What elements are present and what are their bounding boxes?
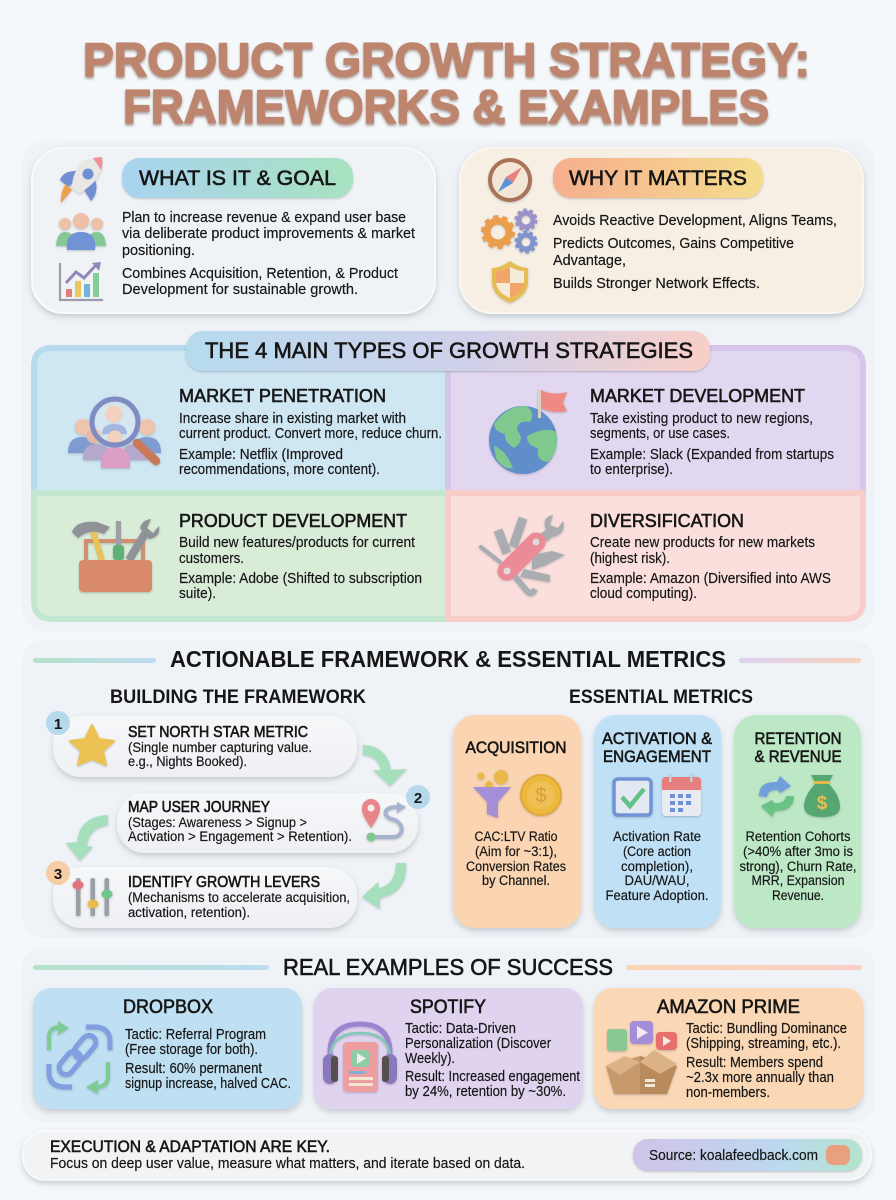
text: amazon prime: (Shipping, streaming, etc.). xyxy=(686,1036,841,1052)
icon: people xyxy=(56,213,106,250)
title: FRAMEWORKS & EXAMPLES xyxy=(123,80,769,133)
icon: funnel and coin: $ xyxy=(535,785,547,807)
text: spotify: by 24%, retention by ~30%. xyxy=(405,1084,566,1100)
section backdrop: examples xyxy=(22,947,875,1122)
text: spotify: Personalization (Discover xyxy=(405,1036,551,1052)
example card: dropbox xyxy=(33,988,302,1109)
heading: real examples: REAL EXAMPLES OF SUCCESS xyxy=(283,954,613,980)
text: product development: Build new features/products for current xyxy=(179,535,415,551)
text: market development: Take existing product to new regions, xyxy=(590,411,813,427)
icon: star xyxy=(70,725,114,765)
metric card: acquisition xyxy=(453,715,581,928)
text: dropbox: Result: 60% permanent xyxy=(125,1061,262,1077)
text: product development: Example: Adobe (Shifted to subscription xyxy=(179,571,422,587)
text: amazon prime: non-members. xyxy=(686,1085,770,1101)
text: spotify: Result: Increased engagement xyxy=(405,1069,580,1085)
text: spotify: Tactic: Data-Driven xyxy=(405,1021,516,1037)
text: what is it body: Development for sustainable growth. xyxy=(122,282,358,298)
example card: dropbox: DROPBOX xyxy=(123,997,213,1018)
text: market penetration: MARKET PENETRATION xyxy=(179,385,386,406)
text: why it matters body: Builds Stronger Network Effects. xyxy=(553,276,760,292)
icon: headphones xyxy=(323,1024,397,1092)
text: diversification: Create new products for new markets xyxy=(590,535,815,551)
text: step 1 xyxy=(128,724,312,769)
text: market development: Example: Slack (Expanded from startups xyxy=(590,447,834,463)
heading pill: what is it: WHAT IS IT & GOAL xyxy=(139,166,336,190)
title xyxy=(83,33,810,133)
heading pill: what is it xyxy=(122,158,353,198)
text: what is it body: Plan to increase revenue & expand user base xyxy=(122,210,406,226)
text: retention metrics: Revenue. xyxy=(772,888,824,903)
text: step 3: IDENTIFY GROWTH LEVERS xyxy=(128,874,320,891)
text: step 2: Activation > Engagement > Retention). xyxy=(128,829,352,844)
badge 1 xyxy=(46,711,70,735)
icon: funnel and coin xyxy=(473,770,561,818)
footer banner xyxy=(23,1131,871,1180)
metric card: acquisition: ACQUISITION xyxy=(466,738,566,757)
text: acquisition metrics: (Aim for ~3:1), xyxy=(475,844,557,859)
metric card: retention xyxy=(734,715,861,928)
text: retention metrics: strong), Churn Rate, xyxy=(740,859,856,874)
text: activation metrics: Activation Rate xyxy=(613,829,701,844)
badge 3 xyxy=(46,861,70,885)
text: product development: PRODUCT DEVELOPMENT xyxy=(179,510,407,531)
icon: compass xyxy=(490,160,530,200)
text: dropbox xyxy=(125,1027,291,1092)
text: retention metrics: Retention Cohorts xyxy=(746,829,851,844)
text: what is it body xyxy=(122,210,415,298)
subheading: essential metrics: ESSENTIAL METRICS xyxy=(569,686,753,708)
panel: what is it and goal xyxy=(32,148,435,313)
icon: sliders xyxy=(72,878,112,916)
text: why it matters body: Advantage, xyxy=(553,253,626,269)
text: activation metrics: (Core action xyxy=(623,844,691,859)
text: step 2: MAP USER JOURNEY xyxy=(128,799,270,816)
footer text: Focus on deep user value, measure what matters, and iterate based on data. xyxy=(50,1156,525,1172)
footer text xyxy=(50,1137,525,1172)
icon: box and media tiles xyxy=(606,1021,677,1094)
cell: market development xyxy=(448,348,863,493)
section backdrop: framework xyxy=(22,640,875,938)
text: what is it body: positioning. xyxy=(122,243,195,259)
icon: magnifier and people xyxy=(68,399,161,468)
text: dropbox: signup increase, halved CAC. xyxy=(125,1076,291,1092)
text: market penetration: Increase share in existing market with xyxy=(179,411,406,427)
text: market development: to enterprise). xyxy=(590,462,673,478)
text: retention metrics: MRR, Expansion xyxy=(752,873,844,888)
footer text: EXECUTION & ADAPTATION ARE KEY. xyxy=(50,1137,330,1156)
text: amazon prime xyxy=(686,1021,847,1101)
text: why it matters body: Avoids Reactive Development, Aligns Teams, xyxy=(553,213,837,229)
icon: shield xyxy=(492,261,528,303)
badge 2 xyxy=(406,785,430,809)
title: PRODUCT GROWTH STRATEGY: xyxy=(83,33,810,86)
text: step 3 xyxy=(128,874,350,920)
icon: gears xyxy=(483,210,536,252)
section backdrop: overview and types xyxy=(22,140,875,632)
text: step 3: (Mechanisms to accelerate acquisition, xyxy=(128,890,350,905)
text: diversification: (highest risk). xyxy=(590,551,670,567)
icon: multitool xyxy=(481,515,565,593)
heading pill: four main types: THE 4 MAIN TYPES OF GROWTH STRATEGIES xyxy=(205,338,693,363)
text: amazon prime: Tactic: Bundling Dominance xyxy=(686,1021,847,1037)
text: retention metrics xyxy=(740,829,856,903)
text: acquisition metrics: by Channel. xyxy=(482,873,550,888)
text: diversification xyxy=(590,510,831,602)
heading: real examples xyxy=(33,954,862,980)
heading: framework and metrics: ACTIONABLE FRAMEWORK & ESSENTIAL METRICS xyxy=(170,646,726,672)
text: step 2 xyxy=(128,799,352,844)
step 2: user journey xyxy=(117,785,430,853)
text: spotify: Weekly). xyxy=(405,1051,455,1067)
step 1: north star metric xyxy=(46,711,357,777)
icon: globe with flag xyxy=(489,390,567,474)
text: why it matters body xyxy=(553,213,837,292)
icon: toolbox xyxy=(72,519,159,592)
text: product development: customers. xyxy=(179,551,244,567)
example card: amazon prime: AMAZON PRIME xyxy=(657,997,800,1018)
text: product development: suite). xyxy=(179,586,216,602)
text: market penetration: Example: Netflix (Improved xyxy=(179,447,343,463)
heading pill: why it matters xyxy=(553,158,763,198)
example card: spotify: SPOTIFY xyxy=(410,997,486,1018)
heading pill: why it matters: WHY IT MATTERS xyxy=(569,166,747,190)
text: amazon prime: ~2.3x more annually than xyxy=(686,1070,834,1086)
icon: checkbox and calendar xyxy=(614,774,701,816)
text: market development xyxy=(590,385,834,478)
panel: four growth strategies xyxy=(34,331,863,619)
heading pill: four main types xyxy=(186,331,710,371)
metric card: activation: ENGAGEMENT xyxy=(603,747,711,766)
icon: chain and arrows xyxy=(49,1021,110,1094)
text: acquisition metrics xyxy=(466,829,566,888)
badge 1: 1 xyxy=(54,716,62,733)
text: market penetration: recommendations, more content). xyxy=(179,462,380,478)
text: dropbox: Tactic: Referral Program xyxy=(125,1027,266,1043)
text: market development: segments, or use cases. xyxy=(590,426,730,442)
badge 2: 2 xyxy=(414,790,422,807)
cell: market penetration xyxy=(34,348,448,493)
cell: diversification xyxy=(448,493,863,619)
cell: product development xyxy=(34,493,448,619)
source pill xyxy=(633,1139,862,1171)
text: step 1: SET NORTH STAR METRIC xyxy=(128,724,308,741)
icon: cycle and money bag xyxy=(759,775,840,817)
subheading: building the framework: BUILDING THE FRAMEWORK xyxy=(110,686,366,708)
metric card: activation: ACTIVATION & xyxy=(602,729,713,748)
text: what is it body: Combines Acquisition, Retention, & Product xyxy=(122,266,398,282)
text: diversification: Example: Amazon (Diversified into AWS xyxy=(590,571,831,587)
arrow: step 2 to 3 xyxy=(66,815,108,861)
text: what is it body: via deliberate product improvements & market xyxy=(122,226,415,242)
text: acquisition metrics: Conversion Rates xyxy=(466,859,566,874)
icon: route pin xyxy=(362,799,406,842)
text: activation metrics: Feature Adoption. xyxy=(606,888,708,903)
text: step 2: (Stages: Awareness > Signup > xyxy=(128,815,307,830)
text: acquisition metrics: CAC:LTV Ratio xyxy=(474,829,558,844)
icon: cycle and money bag: $ xyxy=(817,793,828,814)
text: activation metrics: completion), xyxy=(621,859,693,874)
text: step 1: e.g., Nights Booked). xyxy=(128,754,247,769)
metric card: retention: RETENTION xyxy=(754,729,842,748)
text: step 1: (Single number capturing value. xyxy=(128,740,312,755)
arrow: step 2 to 3 return xyxy=(362,863,406,909)
text: market penetration xyxy=(179,385,442,478)
text: product development xyxy=(179,510,422,602)
text: amazon prime: Result: Members spend xyxy=(686,1055,823,1071)
text: why it matters body: Predicts Outcomes, Gains Competitive xyxy=(553,236,794,252)
example card: spotify xyxy=(314,988,583,1109)
text: dropbox: (Free storage for both). xyxy=(125,1042,258,1058)
metric card: retention: & REVENUE xyxy=(754,747,842,766)
metric card: activation xyxy=(594,715,721,928)
panel: why it matters xyxy=(460,148,863,313)
text: spotify xyxy=(405,1021,580,1100)
text: market penetration: current product. Convert more, reduce churn. xyxy=(179,426,442,442)
text: diversification: cloud computing). xyxy=(590,586,697,602)
arrow: step 1 to 2 xyxy=(363,745,407,786)
text: step 3: activation, retention). xyxy=(128,905,250,920)
text: market development: MARKET DEVELOPMENT xyxy=(590,385,805,406)
badge 3: 3 xyxy=(54,866,62,883)
icon: growth chart xyxy=(60,262,103,300)
text: activation metrics: DAU/WAU, xyxy=(624,873,690,888)
icon: rocket xyxy=(60,157,102,203)
source pill: Source: koalafeedback.com xyxy=(649,1148,818,1164)
example card: amazon prime xyxy=(594,988,863,1109)
text: retention metrics: (>40% after 3mo is xyxy=(743,844,853,859)
step 3: growth levers xyxy=(46,861,357,928)
text: activation metrics xyxy=(606,829,708,903)
text: diversification: DIVERSIFICATION xyxy=(590,510,744,531)
